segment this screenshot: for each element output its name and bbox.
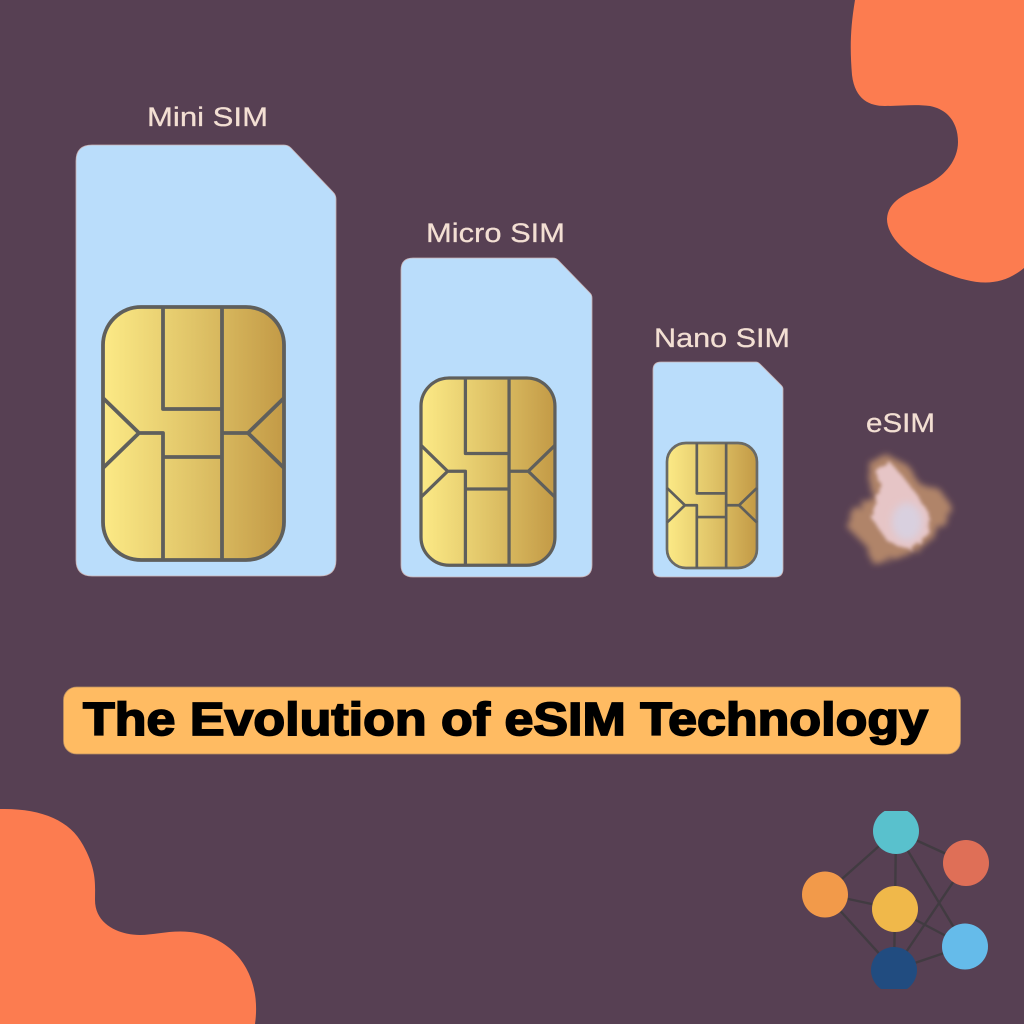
panel: Mini SIM	[76, 102, 336, 576]
label: Nano SIM: Nano SIM	[654, 323, 790, 353]
label: Micro SIM: Micro SIM	[426, 218, 565, 248]
decorative blob: bottom left	[0, 809, 256, 1024]
panel: Micro SIM	[401, 218, 592, 577]
card: Micro SIM body	[401, 258, 592, 577]
icon: eSIM chip speck	[848, 455, 953, 565]
card: Nano SIM body	[653, 362, 783, 577]
label: eSIM: eSIM	[866, 408, 935, 438]
chip: Nano SIM contacts	[667, 443, 757, 568]
chip: Micro SIM contacts	[421, 378, 555, 565]
label: Mini SIM: Mini SIM	[147, 102, 268, 132]
icon: network graph	[802, 808, 989, 993]
card: Mini SIM body	[76, 145, 336, 576]
title banner	[64, 687, 960, 754]
chip: Mini SIM contacts	[103, 307, 284, 560]
decorative blob: top right	[851, 0, 1024, 283]
title: The Evolution of eSIM Technology	[83, 693, 928, 745]
panel: eSIM	[848, 408, 953, 565]
panel: Nano SIM	[653, 323, 790, 577]
